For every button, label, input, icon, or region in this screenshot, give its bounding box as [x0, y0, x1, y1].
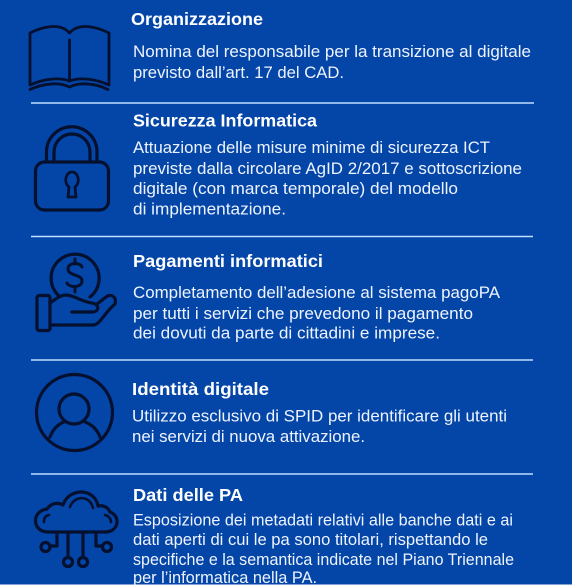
text: dati body: Esposizione dei metadati relativi alle banche dati e ai — [133, 512, 513, 530]
heading: identità digitale: Identità digitale — [132, 379, 269, 399]
text: identità body — [132, 408, 507, 446]
heading: sicurezza informatica: Sicurezza Informatica — [133, 110, 317, 130]
text: organizzazione body: Nomina del responsabile per la transizione al digitale — [133, 43, 531, 61]
heading: dati delle PA: Dati delle PA — [133, 485, 243, 505]
text: dati body — [133, 512, 514, 587]
text: sicurezza body: di implementazione. — [133, 200, 286, 218]
panel: organizzazione — [30, 9, 531, 90]
icon: open book — [30, 26, 109, 90]
panel: sicurezza informatica — [36, 110, 522, 218]
panel: dati delle PA — [35, 485, 514, 587]
text: sicurezza body: previste dalla circolare AgID 2/2017 e sottoscrizione — [133, 160, 522, 178]
text: sicurezza body: Attuazione delle misure minime di sicurezza ICT — [133, 139, 490, 157]
icon: padlock — [36, 127, 108, 210]
text: sicurezza body — [133, 139, 522, 218]
heading: pagamenti informatici: Pagamenti informatici — [133, 251, 323, 271]
panel: identità digitale — [36, 374, 507, 450]
heading: organizzazione: Organizzazione — [131, 9, 263, 29]
icon: user in circle — [36, 374, 112, 450]
panel: pagamenti informatici — [37, 251, 500, 342]
text: dati body: specifiche e la semantica indicate nel Piano Triennale — [133, 551, 514, 569]
text: pagamenti body: dei dovuti da parte di cittadini e imprese. — [133, 324, 440, 342]
text: pagamenti body — [133, 284, 500, 342]
icon: hand holding coin — [37, 254, 115, 330]
text: organizzazione body — [133, 43, 531, 82]
text: identità body: nei servizi di nuova attivazione. — [132, 428, 365, 446]
text: dati body: per l’informatica nella PA. — [133, 569, 317, 587]
text: sicurezza body: digitale (con marca temporale) del modello — [133, 180, 458, 198]
text: pagamenti body: per tutti i servizi che prevedono il pagamento — [133, 305, 473, 323]
icon: cloud network — [35, 492, 117, 566]
text: pagamenti body: Completamento dell’adesione al sistema pagoPA — [133, 284, 500, 302]
text: organizzazione body: previsto dall’art. 17 del CAD. — [133, 64, 344, 82]
text: dati body: dati aperti di cui le pa sono titolari, rispettando le — [133, 531, 488, 549]
text: identità body: Utilizzo esclusivo di SPID per identificare gli utenti — [132, 408, 507, 426]
